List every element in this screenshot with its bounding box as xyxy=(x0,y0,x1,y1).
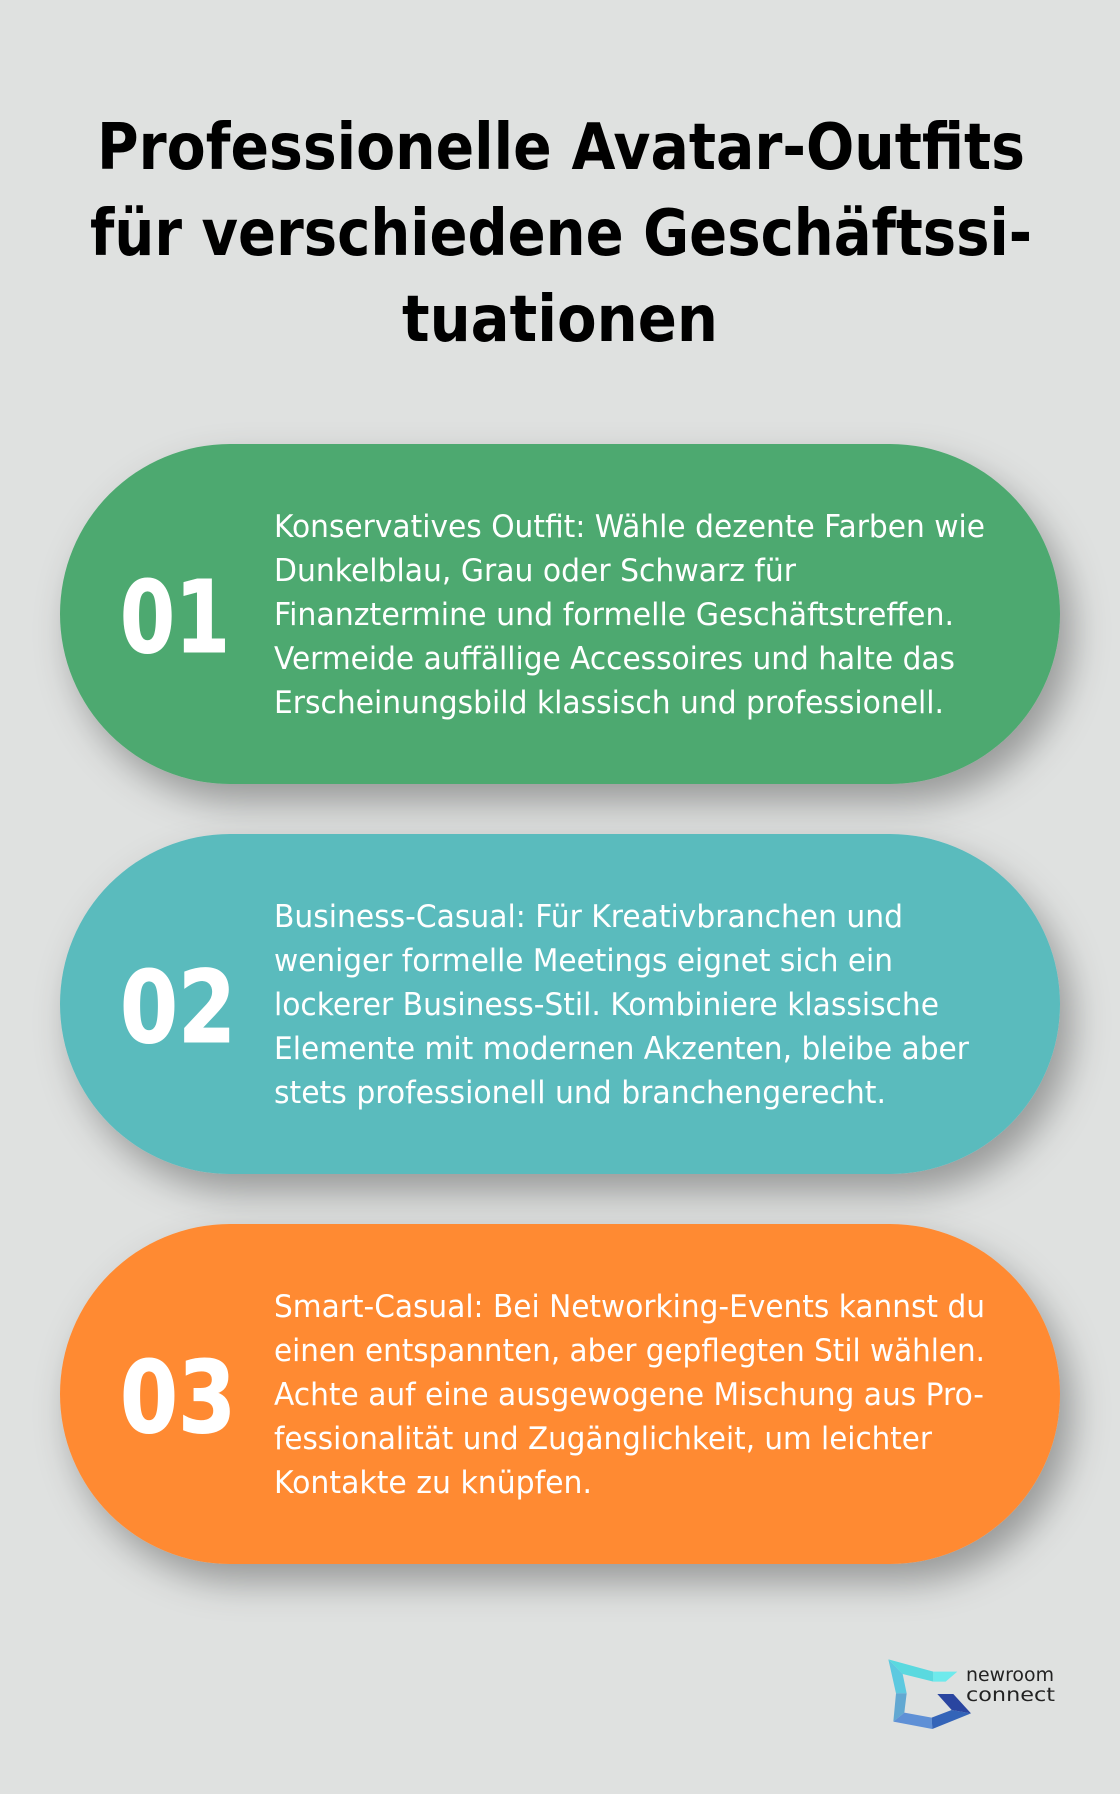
text: business-casual: Business-Casual: Für Kreativbranchen und xyxy=(274,899,903,935)
icon: logo mark xyxy=(888,1659,971,1729)
number 01: 01 xyxy=(120,559,230,676)
logo: newroom connect xyxy=(888,1659,1055,1729)
orange pill xyxy=(60,1224,1060,1564)
number 02: 02 xyxy=(120,949,236,1066)
green pill xyxy=(60,444,1060,784)
teal pill xyxy=(60,834,1060,1174)
panel: step 03 xyxy=(60,1224,1060,1564)
text: konservatives outfit: Erscheinungsbild klassisch und professionell. xyxy=(274,685,944,721)
text: smart-casual: Achte auf eine ausgewogene Mischung aus Pro- xyxy=(274,1377,984,1413)
text: business-casual: lockerer Business-Stil. Kombiniere klassische xyxy=(274,987,939,1023)
text: konservatives outfit: Finanztermine und formelle Geschäftstreffen. xyxy=(274,597,954,633)
text: konservatives outfit: Konservatives Outfit: Wähle dezente Farben wie xyxy=(274,509,985,545)
title: Professionelle Avatar-Outfits xyxy=(97,111,1025,185)
text: smart-casual xyxy=(274,1289,985,1501)
logo wordmark: newroom xyxy=(966,1664,1054,1686)
text: konservatives outfit: Vermeide auffällige Accessoires und halte das xyxy=(274,641,955,677)
text: business-casual xyxy=(274,899,969,1111)
panel: step 01 xyxy=(60,444,1060,784)
text: business-casual: weniger formelle Meetings eignet sich ein xyxy=(274,943,893,979)
title xyxy=(90,111,1032,357)
logo wordmark: connect xyxy=(966,1684,1055,1706)
title: tuationen xyxy=(402,283,718,357)
text: smart-casual: fessionalität und Zugänglichkeit, um leichter xyxy=(274,1421,932,1457)
text: konservatives outfit xyxy=(274,509,985,721)
logo wordmark xyxy=(966,1664,1055,1706)
text: business-casual: stets professionell und branchengerecht. xyxy=(274,1075,886,1111)
text: smart-casual: Kontakte zu knüpfen. xyxy=(274,1465,592,1501)
text: smart-casual: Smart-Casual: Bei Networking-Events kannst du xyxy=(274,1289,985,1325)
text: business-casual: Elemente mit modernen Akzenten, bleibe aber xyxy=(274,1031,969,1067)
text: smart-casual: einen entspannten, aber gepflegten Stil wählen. xyxy=(274,1333,985,1369)
text: konservatives outfit: Dunkelblau, Grau oder Schwarz für xyxy=(274,553,796,589)
number 03: 03 xyxy=(120,1339,236,1456)
panel: step 02 xyxy=(60,834,1060,1174)
